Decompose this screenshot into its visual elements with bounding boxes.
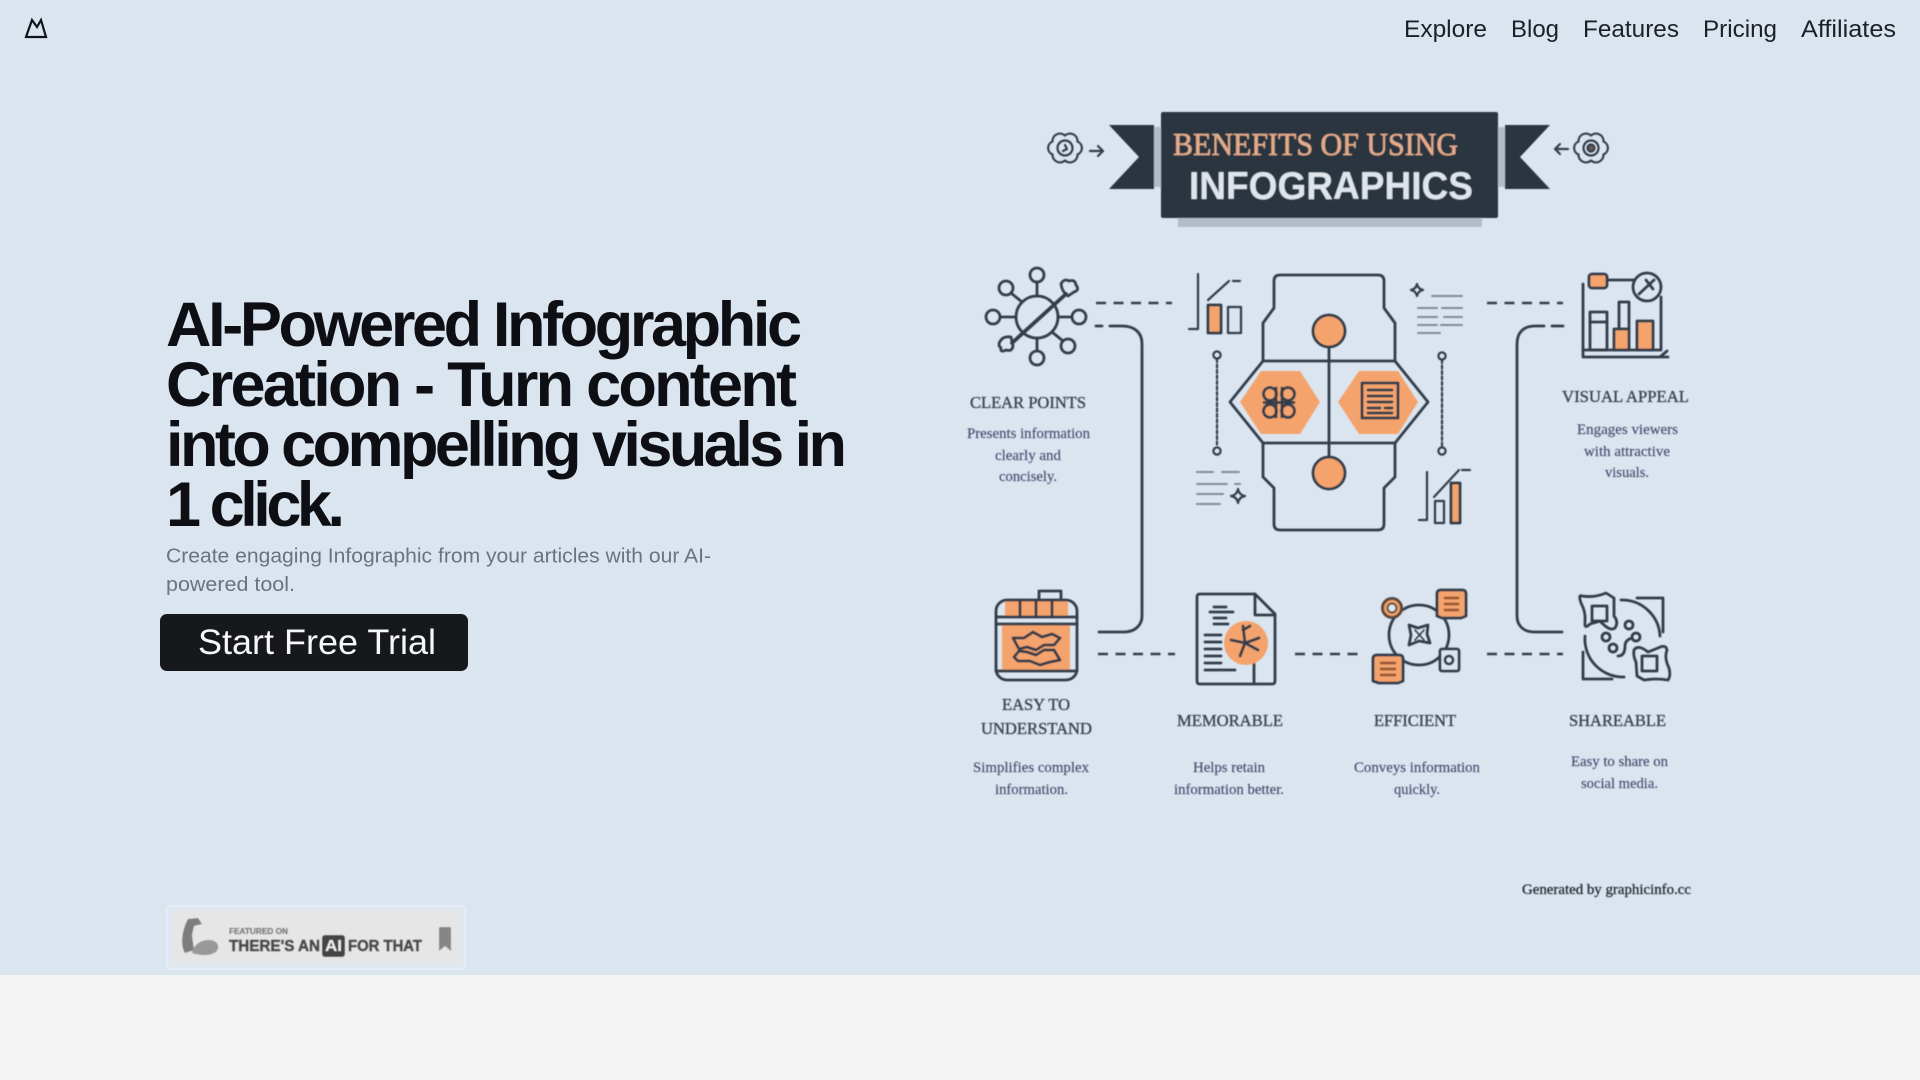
heading and text: clear points: CLEAR POINTS (970, 393, 1086, 412)
heading and text: memorable: MEMORABLE (1177, 711, 1283, 730)
icon: small bar chart top left (1189, 274, 1241, 333)
heading and text: efficient: EFFICIENT (1374, 711, 1456, 730)
heading and text: efficient: Conveys information (1354, 760, 1481, 776)
central hexagon diagram (1230, 275, 1428, 530)
navigation menu (1404, 16, 1896, 43)
badge: featured on there's an AI for that: AI (325, 938, 342, 955)
decoration: text lines bottom left (1197, 472, 1245, 504)
heading and text: clear points: Presents information (967, 426, 1091, 442)
hero heading (166, 290, 847, 540)
credit text: Generated by graphicinfo.cc (1522, 882, 1691, 898)
decoration: text lines top right (1411, 284, 1462, 333)
heading and text: memorable (1174, 711, 1284, 798)
heading and text: visual appeal: with attractive (1584, 444, 1670, 460)
title banner (1109, 112, 1550, 227)
heading and text: memorable: Helps retain (1193, 760, 1266, 776)
infographic image (967, 112, 1691, 898)
title banner: BENEFITS OF USING (1173, 126, 1458, 162)
icon: small bar chart bottom right (1419, 470, 1470, 523)
heading and text: clear points (967, 393, 1091, 485)
icon: command glyph (1264, 388, 1294, 418)
heading and text: shareable: SHAREABLE (1569, 711, 1666, 730)
icon: site logo (26, 20, 46, 37)
title banner: INFOGRAPHICS (1189, 165, 1473, 208)
heading and text: clear points: clearly and (995, 448, 1062, 464)
heading and text: shareable: Easy to share on (1571, 754, 1669, 770)
icon: arm (182, 918, 218, 955)
navigation menu: Pricing (1703, 16, 1777, 43)
badge: featured on there's an AI for that: FOR THAT (348, 938, 422, 955)
icon: document glyph (1362, 383, 1398, 418)
hero subtitle: powered tool. (166, 573, 295, 596)
button: start free trial (160, 614, 468, 671)
hero subtitle (166, 544, 711, 596)
icon: easy to understand calendar (996, 591, 1077, 680)
badge: featured on there's an AI for that: FEATURED ON (229, 926, 288, 936)
heading and text: visual appeal: Engages viewers (1577, 422, 1678, 438)
badge: featured on there's an AI for that (167, 906, 465, 969)
connector lines (1096, 303, 1563, 654)
navigation menu: Features (1583, 16, 1679, 43)
navigation menu: Affiliates (1801, 16, 1896, 43)
icon: right gear and arrow (1555, 134, 1608, 162)
heading and text: visual appeal (1562, 387, 1689, 481)
heading and text: shareable (1569, 711, 1669, 792)
navigation menu: Explore (1404, 16, 1487, 43)
decoration: dotted line left (1213, 351, 1221, 455)
heading and text: easy to understand: UNDERSTAND (981, 719, 1092, 738)
heading and text: visual appeal: VISUAL APPEAL (1562, 387, 1689, 406)
icon: bookmark (439, 927, 451, 951)
icon: efficient cycle (1373, 590, 1466, 683)
heading and text: visual appeal: visuals. (1605, 465, 1649, 481)
icon: shareable (1580, 593, 1670, 680)
heading and text: shareable: social media. (1581, 776, 1658, 792)
heading and text: easy to understand: information. (995, 782, 1068, 798)
hero heading: Creation - Turn content (166, 350, 797, 420)
icon: memorable document (1197, 594, 1275, 684)
heading and text: easy to understand (973, 695, 1092, 798)
heading and text: easy to understand: Simplifies complex (973, 760, 1090, 776)
hero subtitle: Create engaging Infographic from your articles with our AI- (166, 544, 711, 568)
navigation menu: Blog (1511, 16, 1559, 43)
hero heading: 1 click. (166, 470, 345, 540)
heading and text: clear points: concisely. (999, 469, 1057, 485)
badge: featured on there's an AI for that: THERE'S AN (229, 938, 320, 955)
heading and text: easy to understand: EASY TO (1002, 695, 1070, 714)
hero heading: into compelling visuals in (166, 410, 847, 480)
icon: clear points network (986, 268, 1086, 365)
button: start free trial: Start Free Trial (198, 623, 436, 662)
heading and text: memorable: information better. (1174, 782, 1284, 798)
icon: left gear and arrow (1048, 134, 1103, 162)
decoration: dotted line right (1438, 352, 1446, 455)
hero heading: AI-Powered Infographic (166, 290, 802, 360)
heading and text: efficient (1354, 711, 1481, 798)
icon: visual appeal chart (1583, 273, 1668, 357)
heading and text: efficient: quickly. (1394, 782, 1440, 798)
